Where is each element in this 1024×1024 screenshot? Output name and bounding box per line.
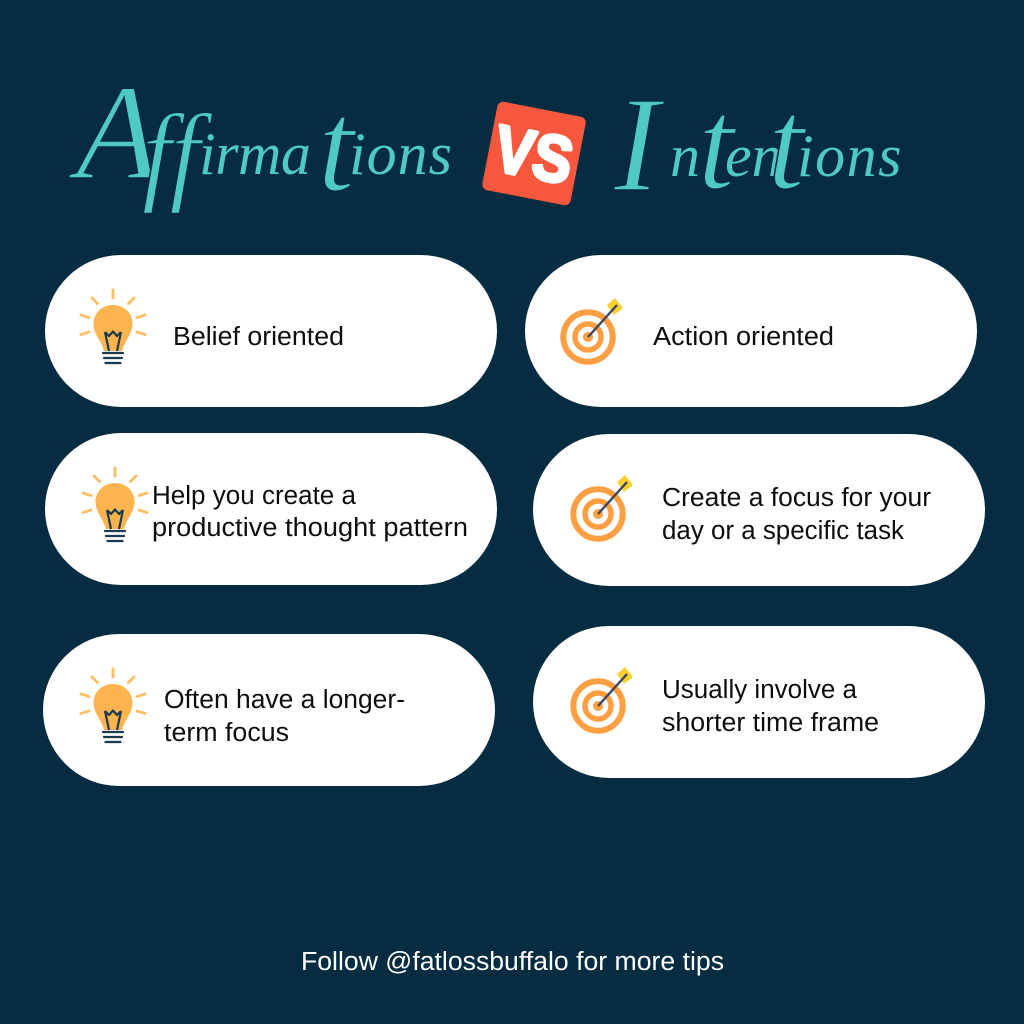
icon: target — [573, 475, 633, 539]
title word: Affirmations: ff — [142, 92, 214, 214]
panel: belief oriented — [45, 255, 497, 407]
text: focus: day or a specific task — [662, 517, 904, 545]
text: shorter time frame — [662, 676, 879, 737]
title — [68, 58, 903, 220]
title word: Affirmations: A — [68, 58, 160, 208]
text: longer-term focus: term focus — [164, 719, 289, 747]
icon: target — [563, 298, 623, 362]
badge: VS: VS — [488, 111, 579, 198]
title word: Intentions: t — [768, 73, 807, 217]
text: thought pattern: productive thought pattern — [152, 514, 468, 542]
panel: thought pattern — [45, 433, 497, 585]
text: thought pattern: Help you create a — [152, 482, 357, 510]
text: longer-term focus — [164, 686, 405, 747]
text: shorter time frame: shorter time frame — [662, 709, 879, 737]
title word: Affirmations: ions — [349, 121, 453, 187]
text: focus: Create a focus for your — [662, 484, 932, 512]
text: focus — [662, 484, 932, 545]
title word: Intentions: I — [613, 70, 665, 220]
icon: light bulb — [83, 468, 147, 541]
title word: Intentions: t — [698, 73, 737, 217]
panel: longer-term focus — [43, 634, 495, 786]
footer: Follow @fatlossbuffalo for more tips — [301, 948, 724, 976]
text: thought pattern — [152, 482, 468, 542]
panel: action oriented — [525, 255, 977, 407]
title word: Intentions: en — [725, 123, 782, 189]
icon: light bulb — [81, 669, 145, 742]
icon: light bulb — [81, 290, 145, 363]
title word: Intentions: n — [670, 123, 700, 189]
panel: shorter time frame — [533, 626, 985, 778]
panel: focus — [533, 434, 985, 586]
text: belief oriented: Belief oriented — [173, 323, 344, 351]
text: action oriented: Action oriented — [653, 323, 834, 351]
icon: target — [573, 667, 633, 731]
title word: Affirmations: t — [318, 75, 357, 219]
title word: Affirmations: irma — [199, 121, 310, 187]
text: shorter time frame: Usually involve a — [662, 676, 858, 704]
title word: Intentions: ions — [797, 123, 903, 189]
text: longer-term focus: Often have a longer- — [164, 686, 405, 714]
